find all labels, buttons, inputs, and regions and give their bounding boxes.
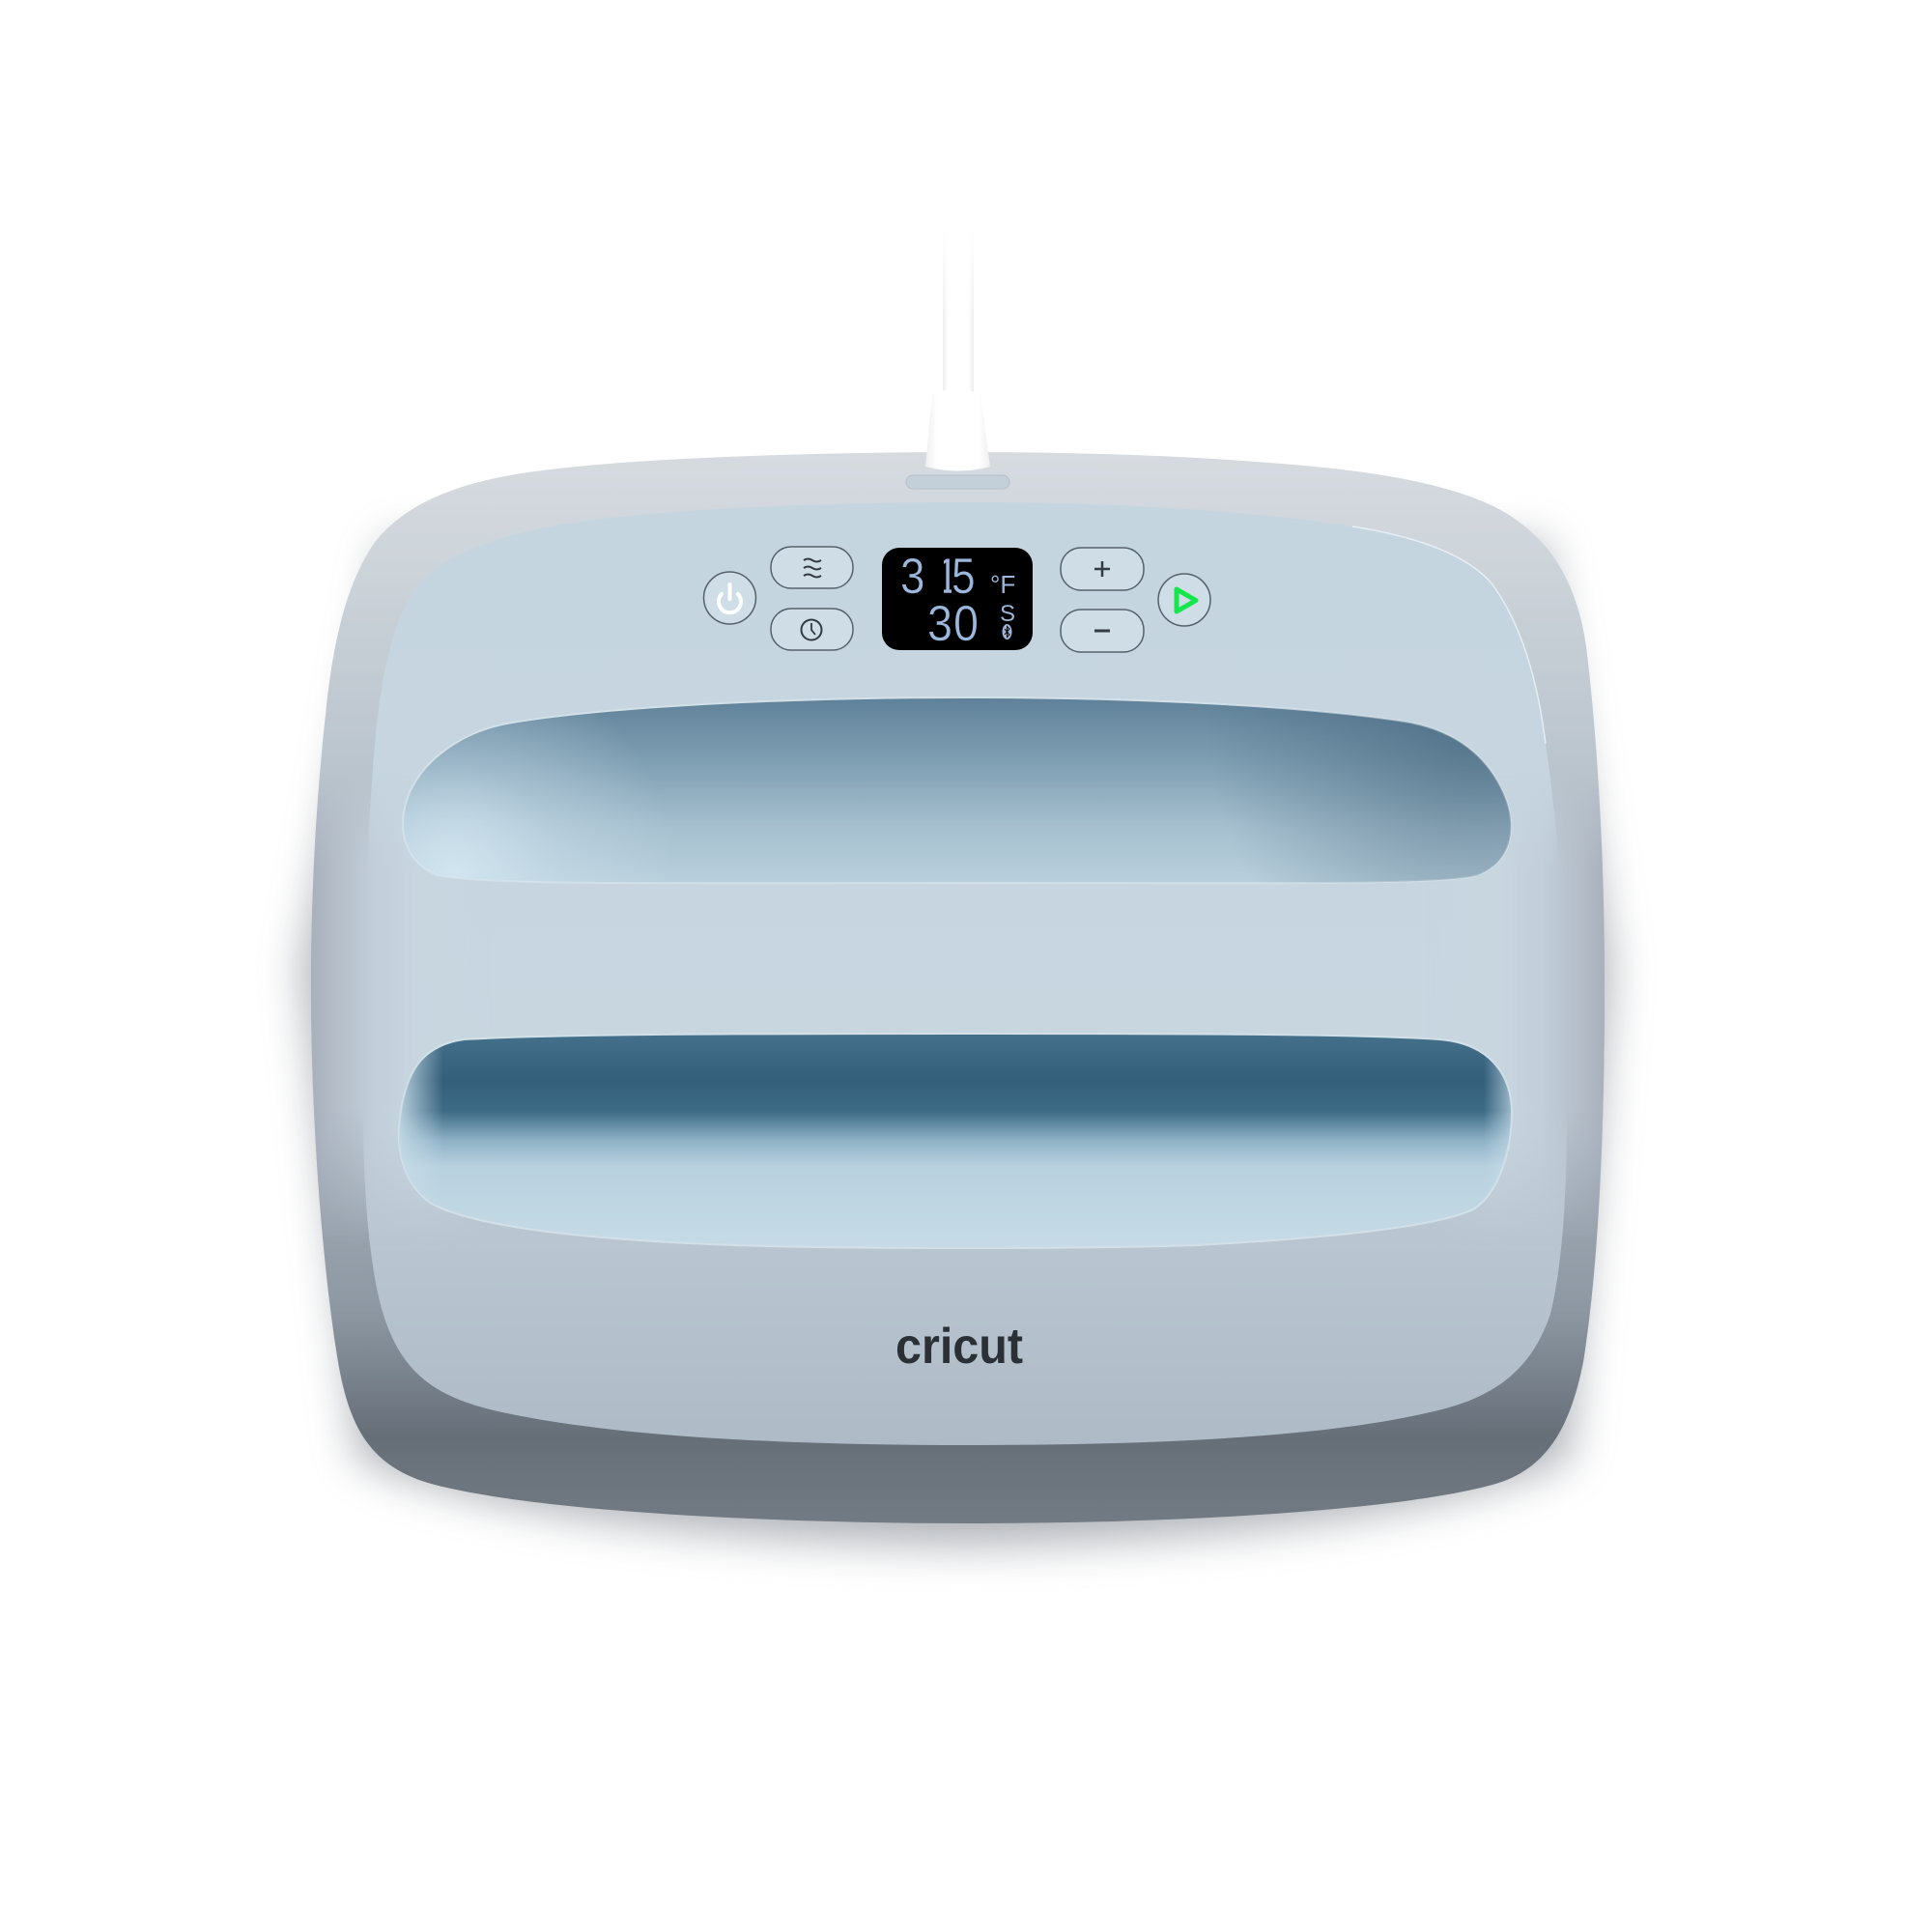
LCD display — [882, 548, 1033, 652]
cable port slot — [906, 475, 1009, 489]
cord strain relief — [925, 389, 990, 471]
start button — [1158, 574, 1210, 626]
LCD display: 3 — [927, 596, 952, 652]
LCD display: 0 — [953, 596, 979, 652]
power button — [703, 572, 755, 624]
timer button — [771, 609, 853, 650]
product illustration: heat press — [278, 272, 1634, 1571]
LCD display: 5 — [952, 549, 976, 605]
control panel — [703, 547, 1210, 652]
lid face panel — [363, 502, 1567, 1445]
LCD display: S — [1000, 601, 1015, 627]
brand logo: cricut — [895, 1319, 1023, 1375]
LCD display: 3 — [900, 549, 924, 605]
LCD display: 1 — [935, 549, 959, 605]
heat button — [771, 547, 853, 588]
LCD display: °F — [990, 570, 1015, 599]
press body shell — [311, 452, 1605, 1523]
centre band side shading — [311, 810, 1605, 1215]
upper handle recess — [403, 697, 1511, 883]
minus button — [1061, 610, 1144, 652]
lower handle recess — [399, 1034, 1512, 1248]
drop shadow — [301, 541, 1611, 1546]
plus button — [1061, 548, 1144, 590]
power cord — [937, 228, 980, 401]
